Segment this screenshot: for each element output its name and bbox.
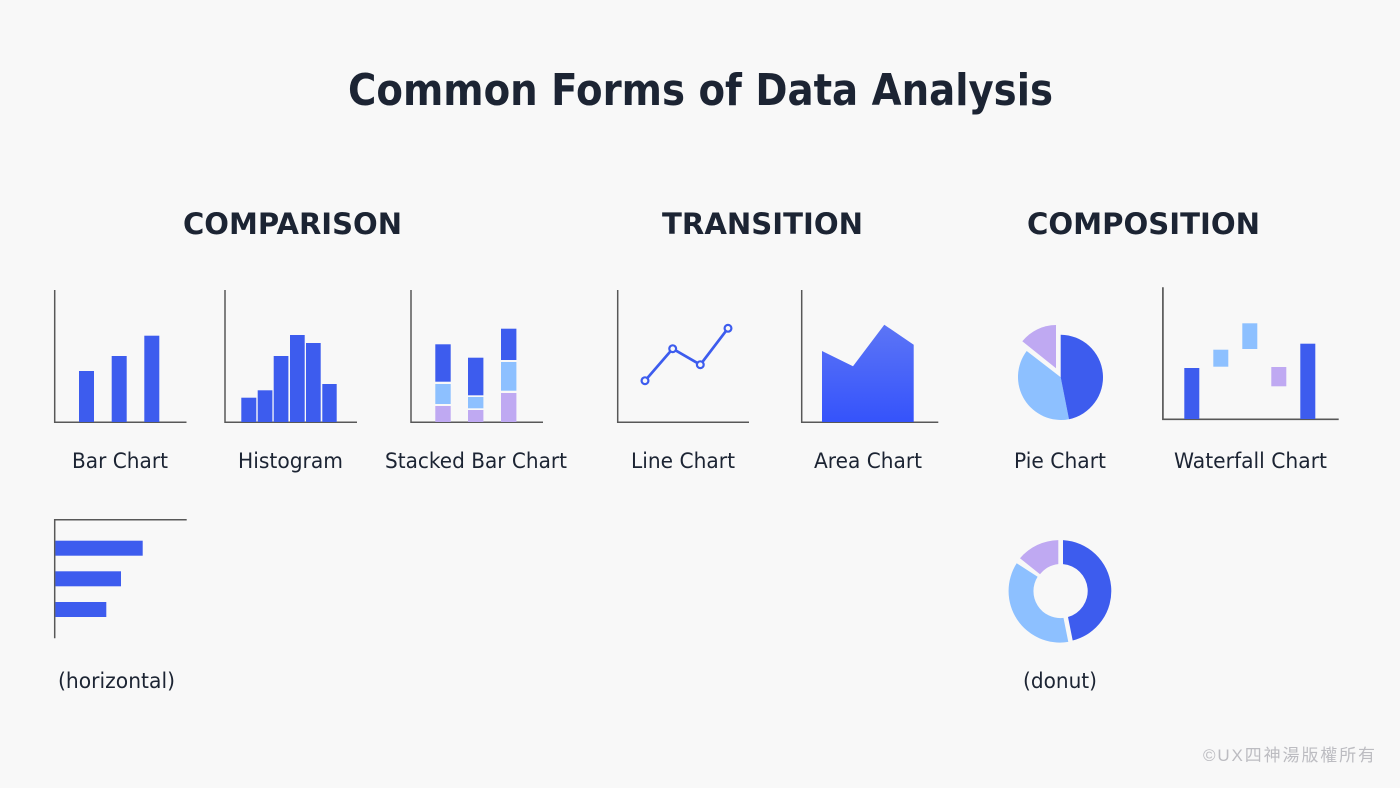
panel: stacked bar chart [385, 290, 567, 473]
label: stacked bar chart: Stacked Bar Chart [385, 449, 567, 473]
label: line chart: Line Chart [631, 449, 735, 473]
label: bar chart: Bar Chart [72, 449, 168, 473]
heading: composition: COMPOSITION [1027, 207, 1260, 241]
panel: histogram [225, 290, 357, 473]
panel: horizontal bar chart [55, 520, 187, 693]
panel: line chart [618, 290, 749, 473]
panel: donut chart [1009, 540, 1111, 693]
label: pie chart: Pie Chart [1014, 449, 1106, 473]
heading: comparison: COMPARISON [183, 207, 402, 241]
label: histogram: Histogram [238, 449, 343, 473]
title: Common Forms of Data Analysis [348, 65, 1053, 116]
watermark: ©UX四神湯版權所有 [1203, 746, 1375, 765]
label: horizontal: (horizontal) [58, 669, 175, 693]
label: donut: (donut) [1023, 669, 1097, 693]
heading: transition: TRANSITION [662, 207, 863, 241]
panel: bar chart [55, 290, 187, 473]
label: waterfall chart: Waterfall Chart [1174, 449, 1327, 473]
panel: waterfall chart [1163, 287, 1339, 473]
panel: pie chart [1014, 325, 1106, 473]
label: area chart: Area Chart [814, 449, 922, 473]
panel: area chart [802, 290, 938, 473]
